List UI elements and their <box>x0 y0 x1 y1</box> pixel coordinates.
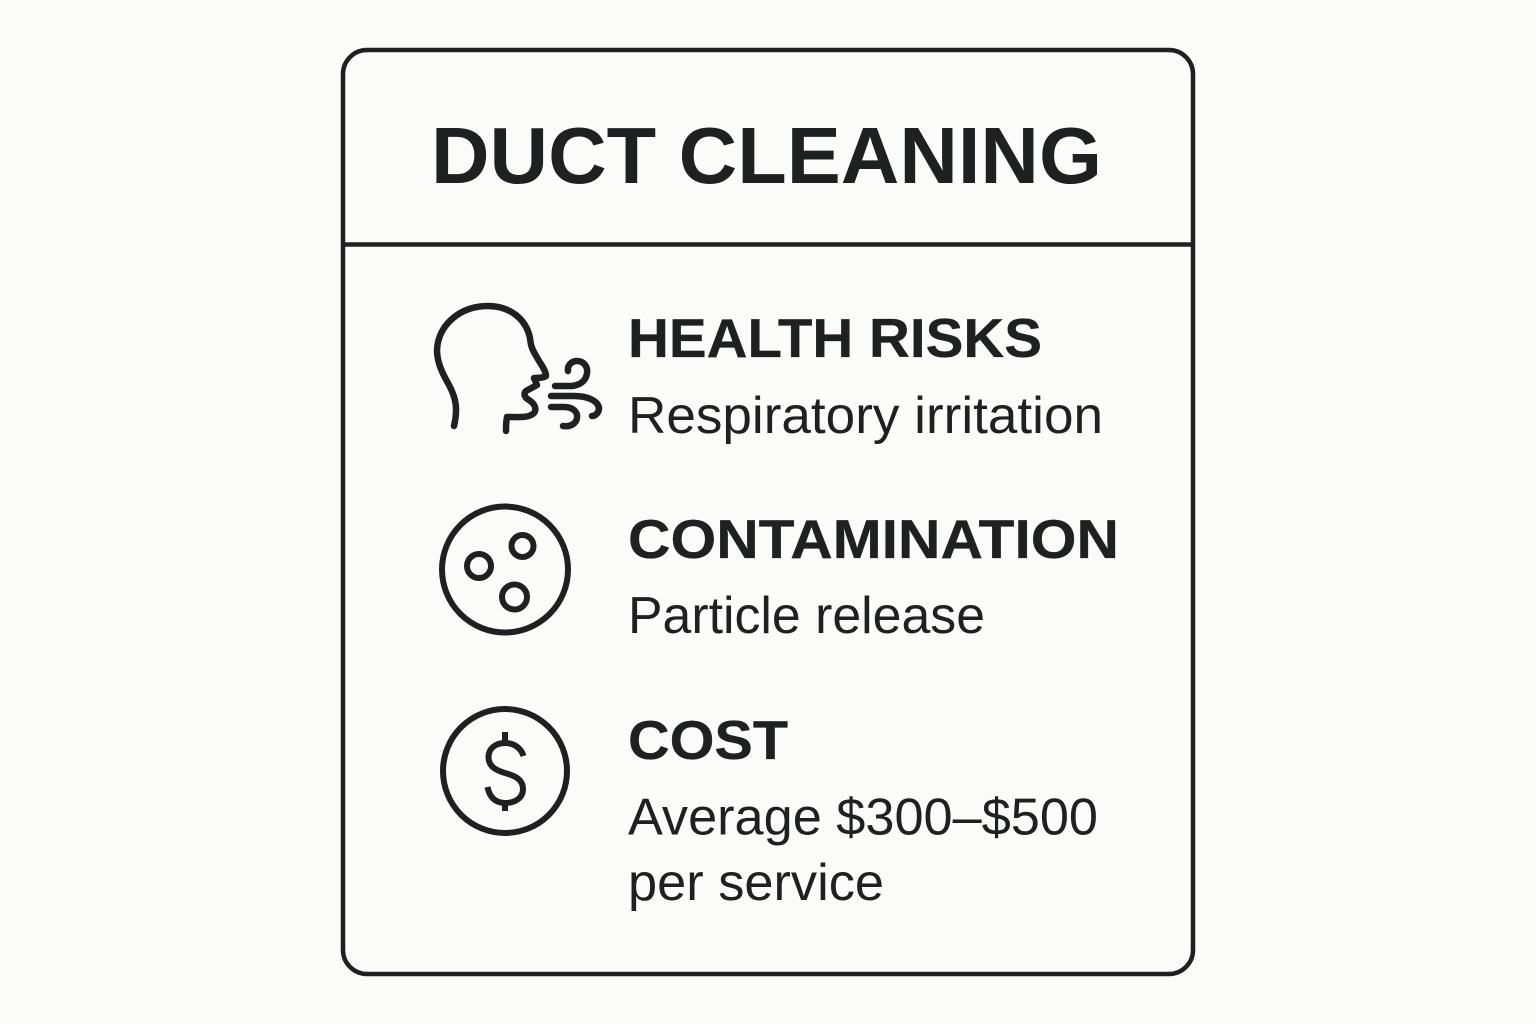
section: cost <box>443 709 1098 912</box>
text: respiratory irritation: Respiratory irritation <box>628 387 1103 445</box>
heading: contamination: CONTAMINATION <box>628 508 1119 570</box>
section: health risks <box>437 306 1103 445</box>
heading: health risks: HEALTH RISKS <box>628 307 1042 369</box>
section: contamination <box>442 506 1119 645</box>
text: average cost: Average $300–$500 <box>628 788 1098 846</box>
panel: duct cleaning card <box>343 50 1193 974</box>
icon: head breathing <box>437 306 599 431</box>
heading: cost: COST <box>628 709 788 771</box>
text: particle release: Particle release <box>628 587 985 645</box>
icon: particles in circle <box>442 506 568 632</box>
title: DUCT CLEANING <box>431 111 1102 200</box>
icon: dollar in circle <box>443 709 567 833</box>
text: per service: per service <box>628 854 884 912</box>
